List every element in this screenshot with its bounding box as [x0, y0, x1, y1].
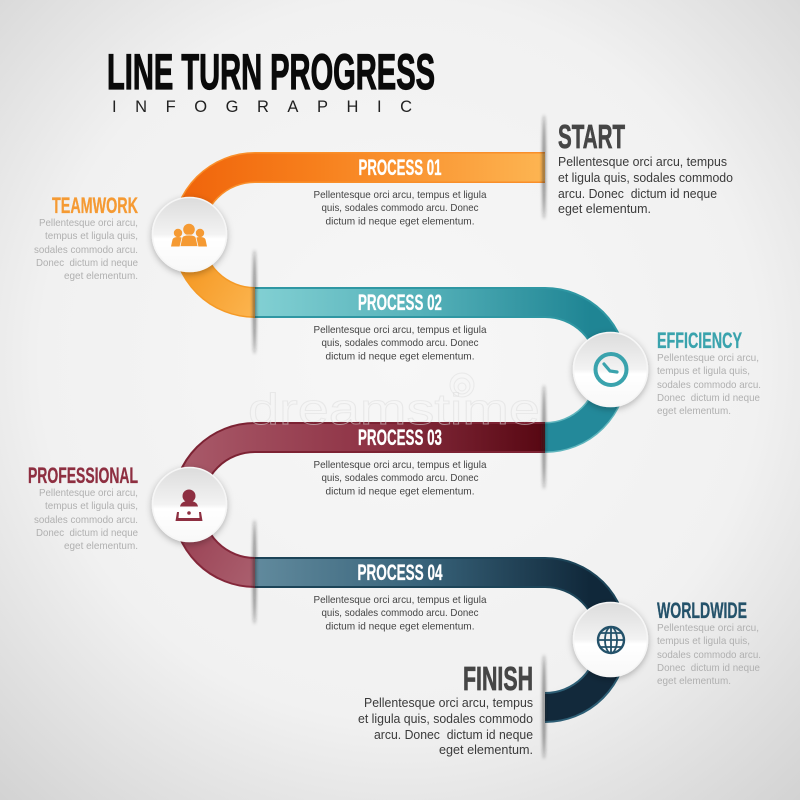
band: orange process 01	[188, 168, 545, 302]
text block: professional: Pellentesque orci arcu,	[39, 487, 138, 499]
text block: teamwork: eget elementum.	[64, 270, 138, 282]
text block: teamwork	[34, 193, 138, 282]
text block: efficiency: sodales commodo arcu.	[657, 379, 761, 391]
text: process 02 body: quis, sodales commodo arcu. Donec	[322, 337, 478, 349]
heading: worldwide: WORLDWIDE	[657, 598, 747, 623]
text block: teamwork: Pellentesque orci arcu,	[39, 217, 138, 229]
heading: professional: PROFESSIONAL	[28, 463, 138, 488]
text block: professional: eget elementum.	[64, 540, 138, 552]
text block: efficiency: Pellentesque orci arcu,	[657, 352, 759, 364]
icon: clock	[596, 354, 626, 385]
label: process 04: PROCESS 04	[358, 560, 443, 585]
text: process 01 body	[314, 189, 487, 228]
text block: teamwork: sodales commodo arcu.	[34, 244, 138, 256]
text block: worldwide: tempus et ligula quis,	[657, 635, 750, 647]
icon: person with laptop	[176, 490, 202, 521]
circle: efficiency icon	[574, 332, 648, 406]
text: process 01 body: dictum id neque eget elementum.	[326, 216, 474, 228]
watermark: dreamstime	[248, 385, 540, 434]
text block: worldwide: Donec dictum id neque	[657, 662, 760, 674]
text block: professional: tempus et ligula quis,	[45, 500, 138, 512]
text block: professional	[28, 463, 138, 552]
text block: efficiency: eget elementum.	[657, 405, 731, 417]
label: process 02: PROCESS 02	[358, 290, 442, 315]
text block: start: et ligula quis, sodales commodo	[558, 170, 733, 185]
text block: worldwide: eget elementum.	[657, 675, 731, 687]
circle: professional icon	[152, 468, 226, 542]
text: process 02 body: Pellentesque orci arcu, tempus et ligula	[314, 324, 487, 336]
main heading: LINE TURN PROGRESS	[107, 44, 435, 100]
text: process 01 body: Pellentesque orci arcu, tempus et ligula	[314, 189, 487, 201]
circle: worldwide icon	[574, 602, 648, 676]
text block: worldwide: sodales commodo arcu.	[657, 649, 761, 661]
text block: start: eget elementum.	[558, 201, 651, 216]
band: navy process 04	[255, 572, 612, 708]
text block: start: Pellentesque orci arcu, tempus	[558, 154, 727, 169]
text block: teamwork: Donec dictum id neque	[36, 257, 138, 269]
heading: efficiency: EFFICIENCY	[657, 328, 742, 353]
text: process 03 body: dictum id neque eget elementum.	[326, 486, 474, 498]
text block: professional: sodales commodo arcu.	[34, 514, 138, 526]
label: process 01: PROCESS 01	[358, 155, 442, 180]
icon: globe	[598, 627, 624, 653]
text block: finish: arcu. Donec dictum id neque	[374, 727, 533, 742]
text block: efficiency: Donec dictum id neque	[657, 392, 760, 404]
title	[107, 44, 435, 116]
text block: teamwork: tempus et ligula quis,	[45, 230, 138, 242]
text block: finish: et ligula quis, sodales commodo	[358, 711, 533, 726]
label: process 03: PROCESS 03	[358, 425, 442, 450]
text block: start	[558, 118, 733, 216]
text block: worldwide	[657, 598, 761, 687]
text: process 02 body	[314, 324, 487, 362]
watermark	[248, 373, 540, 434]
subheading: INFOGRAPHIC	[112, 98, 412, 116]
text block: finish: eget elementum.	[439, 742, 533, 757]
band: maroon process 03	[188, 438, 545, 572]
text: process 04 body: dictum id neque eget elementum.	[326, 620, 474, 632]
text: process 03 body: quis, sodales commodo arcu. Donec	[322, 472, 478, 484]
text block: efficiency: tempus et ligula quis,	[657, 365, 750, 377]
band: teal lower arc	[545, 370, 612, 438]
text: process 03 body: Pellentesque orci arcu, tempus et ligula	[314, 459, 487, 471]
text: process 03 body	[314, 459, 487, 498]
text block: finish: Pellentesque orci arcu, tempus	[364, 695, 533, 710]
text block: start: arcu. Donec dictum id neque	[558, 186, 717, 201]
text: process 04 body	[314, 594, 487, 632]
circle: teamwork icon	[152, 198, 226, 272]
text block: professional: Donec dictum id neque	[36, 527, 138, 539]
icon: team	[171, 224, 207, 246]
heading: start: START	[558, 118, 625, 155]
text block: efficiency	[657, 328, 761, 417]
heading: teamwork: TEAMWORK	[52, 193, 138, 218]
text block: finish	[358, 660, 533, 757]
panel shadow edges	[253, 115, 545, 759]
band: teal process 02	[255, 302, 612, 370]
text: process 04 body: quis, sodales commodo arcu. Donec	[322, 607, 478, 619]
heading: finish: FINISH	[463, 660, 533, 697]
text: process 01 body: quis, sodales commodo arcu. Donec	[322, 202, 478, 214]
text block: worldwide: Pellentesque orci arcu,	[657, 622, 759, 634]
text: process 02 body: dictum id neque eget elementum.	[326, 350, 474, 362]
text: process 04 body: Pellentesque orci arcu, tempus et ligula	[314, 594, 487, 606]
